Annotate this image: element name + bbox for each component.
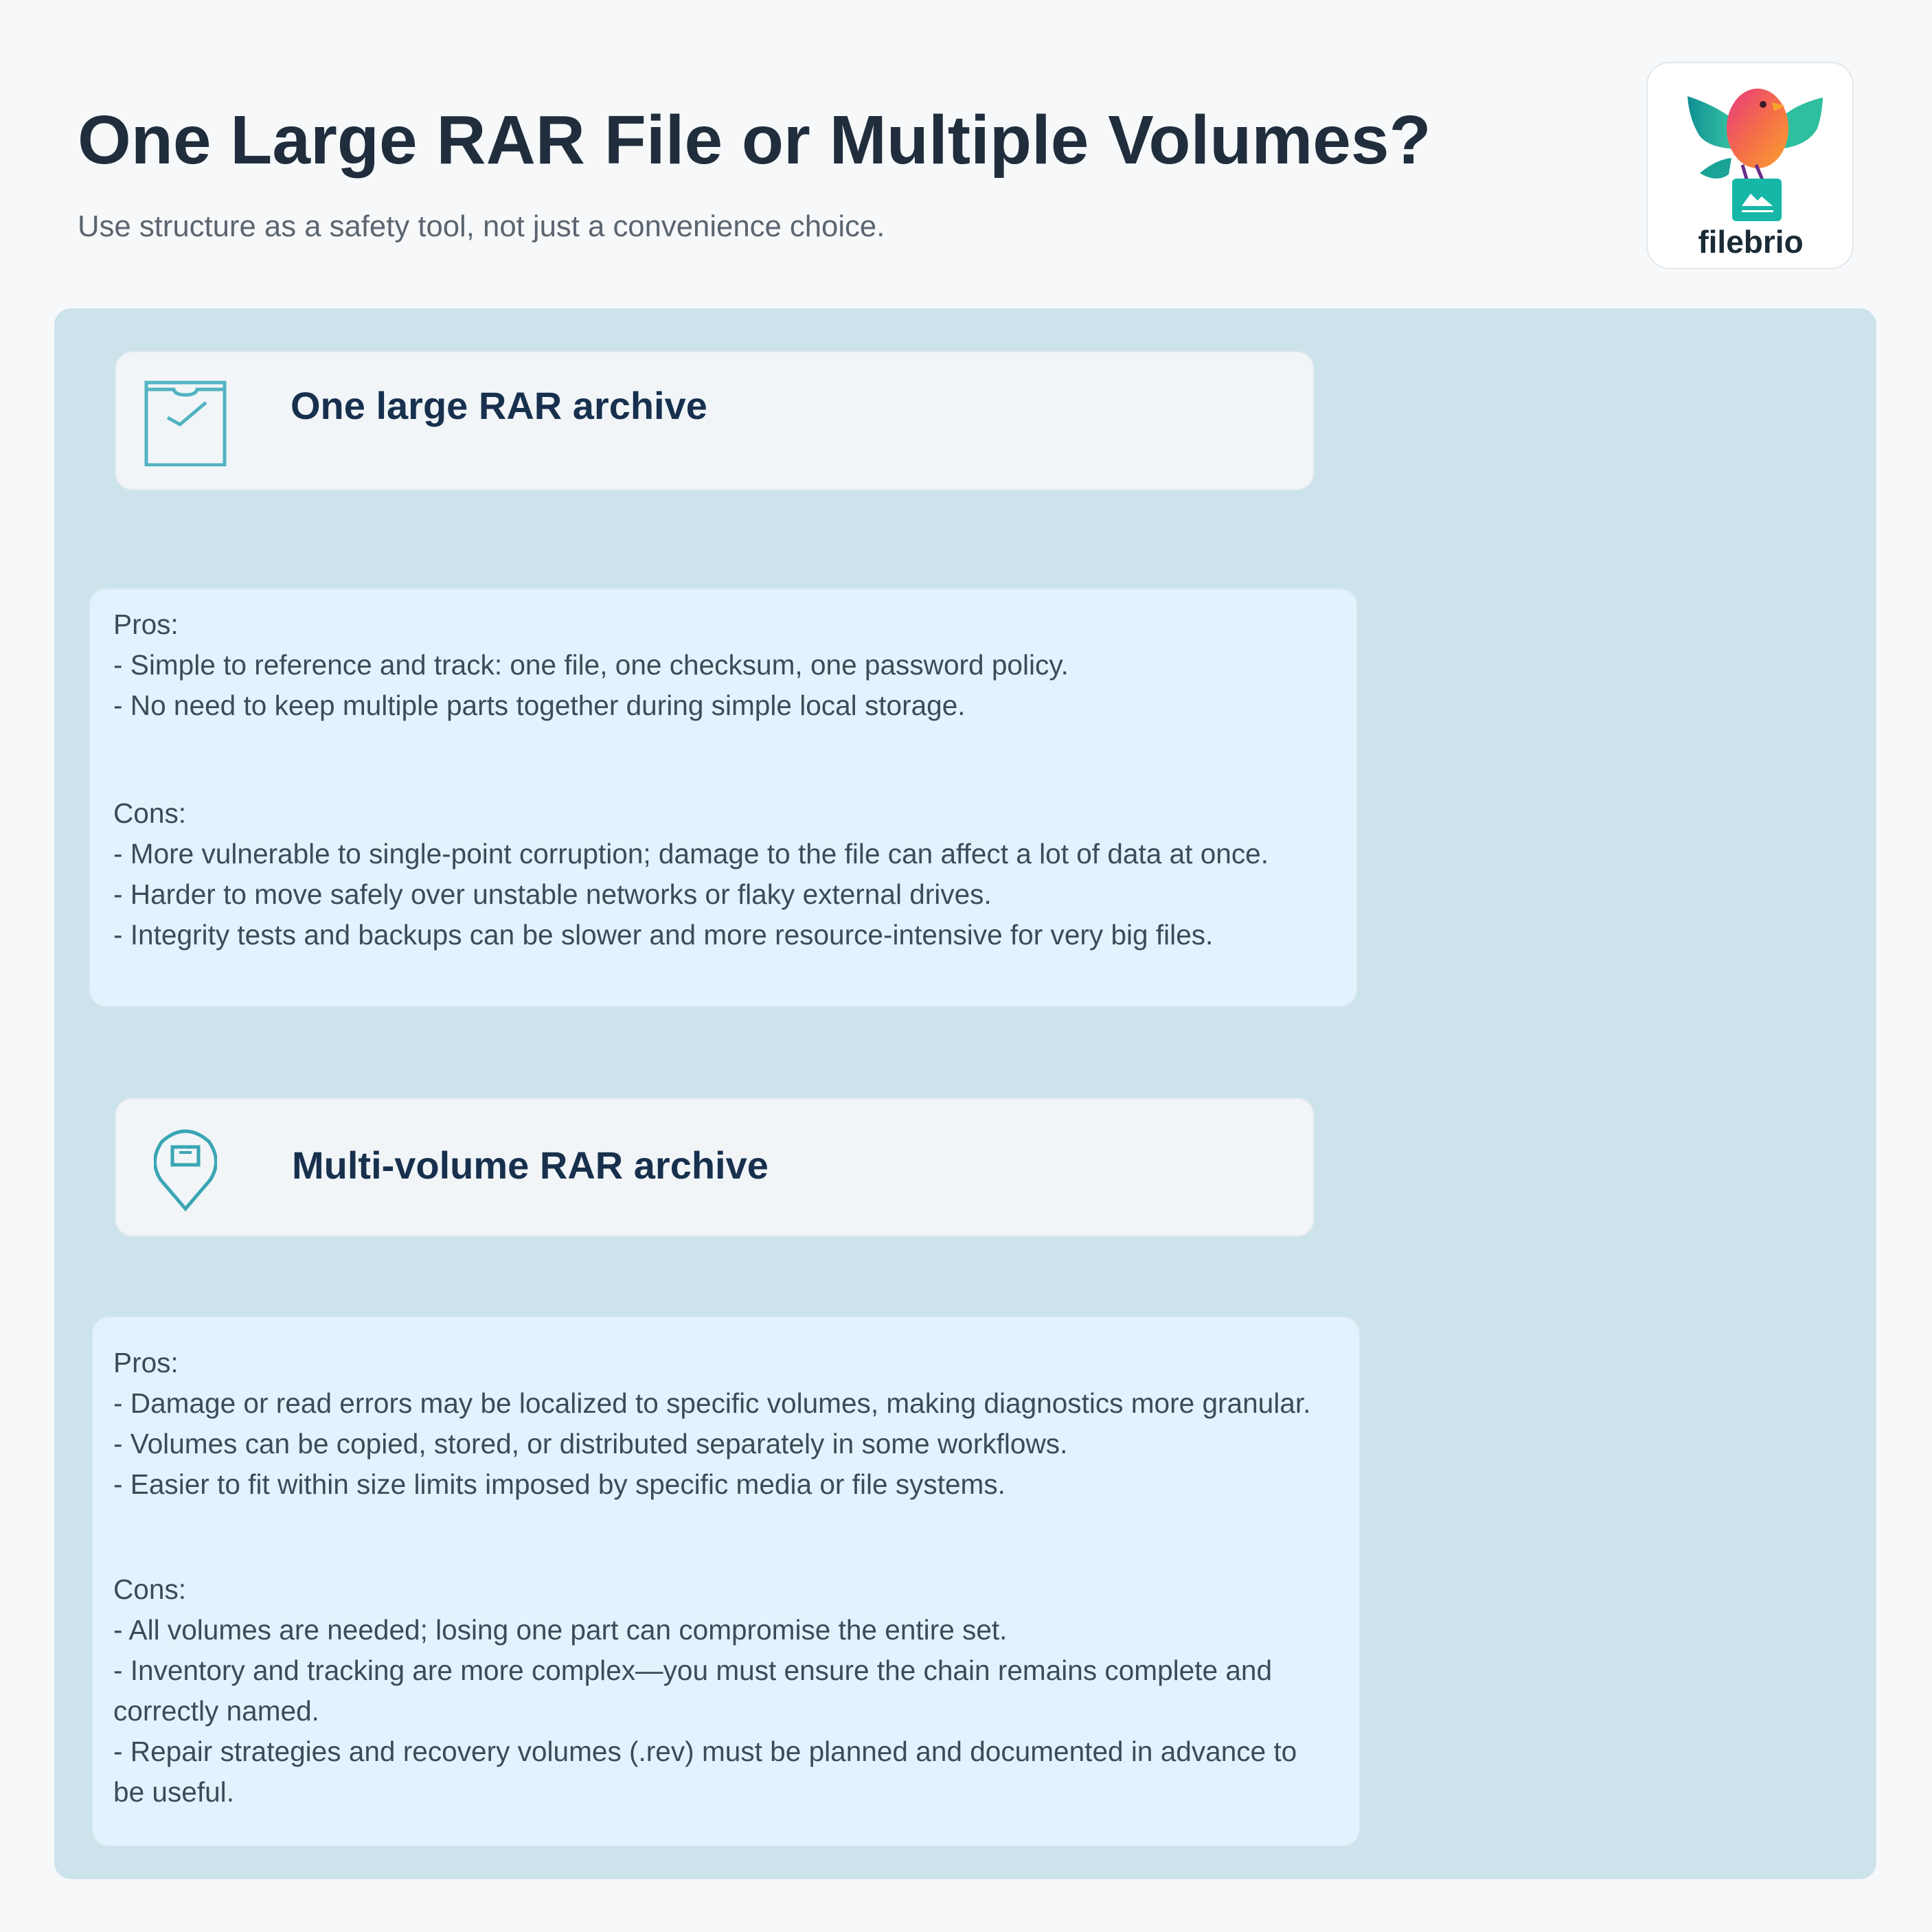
icon: box with check (144, 380, 227, 466)
text: cons 2 (113, 1573, 1297, 1808)
text: pros 1: Pros: (113, 609, 179, 640)
text: cons 1: Cons: (113, 797, 186, 829)
text: cons 2: - Inventory and tracking are more complex—you must ensure the chain remains complete and (113, 1655, 1272, 1686)
text: cons 1: - More vulnerable to single-point corruption; damage to the file can affect a lot of data at once. (113, 838, 1269, 870)
text: cons 2: - Repair strategies and recovery volumes (.rev) must be planned and documented in advance to (113, 1736, 1297, 1767)
text: pros 2: - Easier to fit within size limits imposed by specific media or file systems. (113, 1468, 1005, 1500)
subtitle: Use structure as a safety tool, not just a convenience choice. (78, 209, 885, 243)
main panel (54, 308, 1876, 1879)
panel: multi-volume header (115, 1098, 1315, 1237)
text: pros 2 (113, 1347, 1310, 1500)
icon: bird logo (1687, 89, 1823, 221)
text: cons 1: - Integrity tests and backups can be slower and more resource-intensive for very big files. (113, 919, 1213, 951)
text: cons 2: be useful. (113, 1776, 234, 1808)
text: pros 1 (113, 609, 1069, 721)
text: pros 2: Pros: (113, 1347, 179, 1378)
text: cons 2: - All volumes are needed; losing one part can compromise the entire set. (113, 1614, 1007, 1646)
text: cons 1: - Harder to move safely over unstable networks or flaky external drives. (113, 878, 992, 910)
heading: Multi-volume RAR archive (292, 1144, 769, 1187)
panel: one large RAR pros/cons (89, 588, 1358, 1008)
text: pros 1: - No need to keep multiple parts together during simple local storage. (113, 690, 966, 721)
text: pros 1: - Simple to reference and track: one file, one checksum, one password policy. (113, 649, 1069, 681)
heading: One large RAR archive (291, 384, 707, 427)
text: pros 2: - Damage or read errors may be localized to specific volumes, making diagnostics more granular. (113, 1387, 1310, 1419)
panel: one large RAR header (115, 351, 1315, 490)
title: One Large RAR File or Multiple Volumes? (78, 102, 1431, 179)
icon: map pin (154, 1129, 217, 1212)
logo wordmark: filebrio (1698, 224, 1804, 260)
panel: multi-volume pros/cons (91, 1316, 1361, 1847)
text: cons 2: Cons: (113, 1573, 186, 1605)
text: pros 2: - Volumes can be copied, stored, or distributed separately in some workflows. (113, 1428, 1067, 1459)
text: cons 2: correctly named. (113, 1695, 319, 1727)
text: cons 1 (113, 797, 1269, 951)
logo card (1646, 62, 1854, 269)
